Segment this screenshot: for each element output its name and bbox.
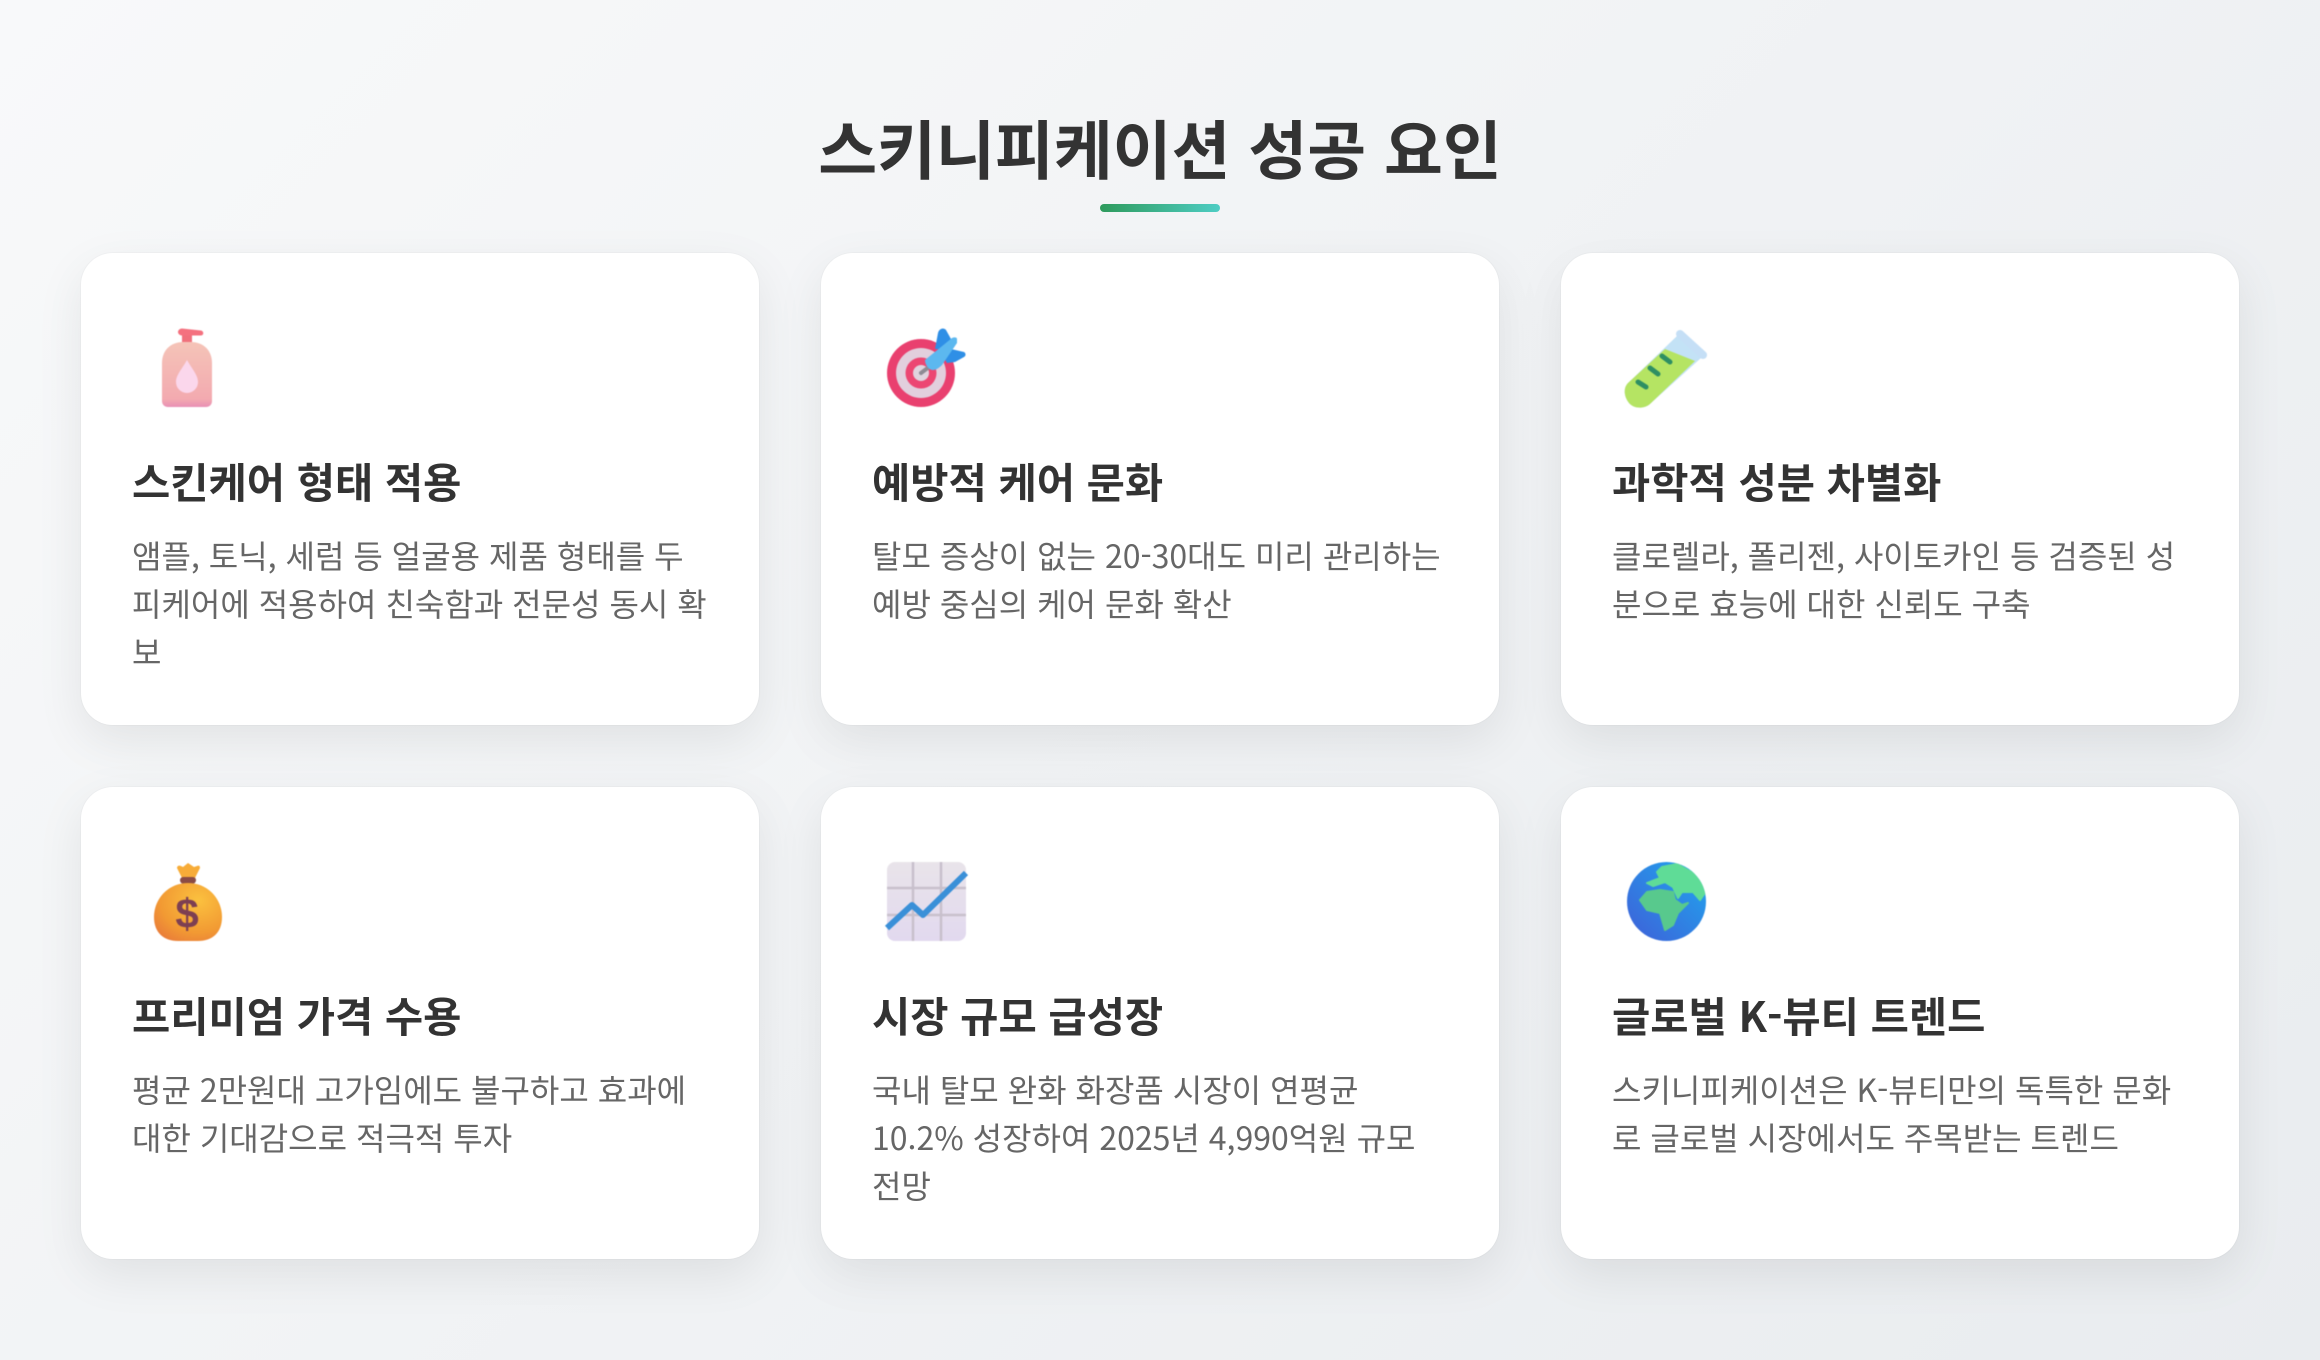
card text [132,1066,686,1160]
card text: 탈모 증상이 없는 20-30대도 미리 관리하는 [872,532,1441,578]
panel: skincare format [81,253,759,725]
card text [1612,1066,2171,1160]
title accent bar [1100,204,1220,212]
panel: global K-beauty [1561,787,2239,1259]
icon: globe [1626,861,1707,942]
card heading: 과학적 성분 차별화 [1612,450,1941,510]
card heading: 시장 규모 급성장 [872,984,1163,1044]
icon: test tube [1624,330,1708,408]
card text: 피케어에 적용하여 친숙함과 전문성 동시 확 [132,580,707,626]
card heading: 글로벌 K-뷰티 트렌드 [1612,984,1985,1044]
card heading: 스킨케어 형태 적용 [132,450,461,510]
card text: 평균 2만원대 고가임에도 불구하고 효과에 [132,1066,686,1112]
card text: 국내 탈모 완화 화장품 시장이 연평균 [872,1066,1358,1112]
icon: bullseye with dart [886,328,966,408]
card text [872,532,1441,626]
icon: money bag: $ [175,890,199,937]
panel: preventive care [821,253,1499,725]
title: 스키니피케이션 성공 요인 [818,101,1502,193]
card text: 대한 기대감으로 적극적 투자 [132,1114,512,1160]
icon: lotion bottle [162,328,212,408]
card text: 예방 중심의 케어 문화 확산 [872,580,1232,626]
icon: rising chart [884,862,968,942]
card heading: 예방적 케어 문화 [872,450,1163,510]
panel: scientific ingredients [1561,253,2239,725]
card heading: 프리미엄 가격 수용 [132,984,461,1044]
card text: 보 [132,628,161,674]
card text [132,532,707,674]
card text: 전망 [872,1162,931,1208]
icon: money bag [153,862,223,942]
card text: 분으로 효능에 대한 신뢰도 구축 [1612,580,2031,626]
card text: 스키니피케이션은 K-뷰티만의 독특한 문화 [1612,1066,2171,1112]
card text: 10.2% 성장하여 2025년 4,990억원 규모 [872,1114,1416,1160]
card text [872,1066,1416,1208]
card text: 앰플, 토닉, 세럼 등 얼굴용 제품 형태를 두 [132,532,684,578]
panel: market growth [821,787,1499,1259]
card text [1612,532,2175,626]
card text: 클로렐라, 폴리젠, 사이토카인 등 검증된 성 [1612,532,2175,578]
panel: premium price [81,787,759,1259]
card text: 로 글로벌 시장에서도 주목받는 트렌드 [1612,1114,2119,1160]
